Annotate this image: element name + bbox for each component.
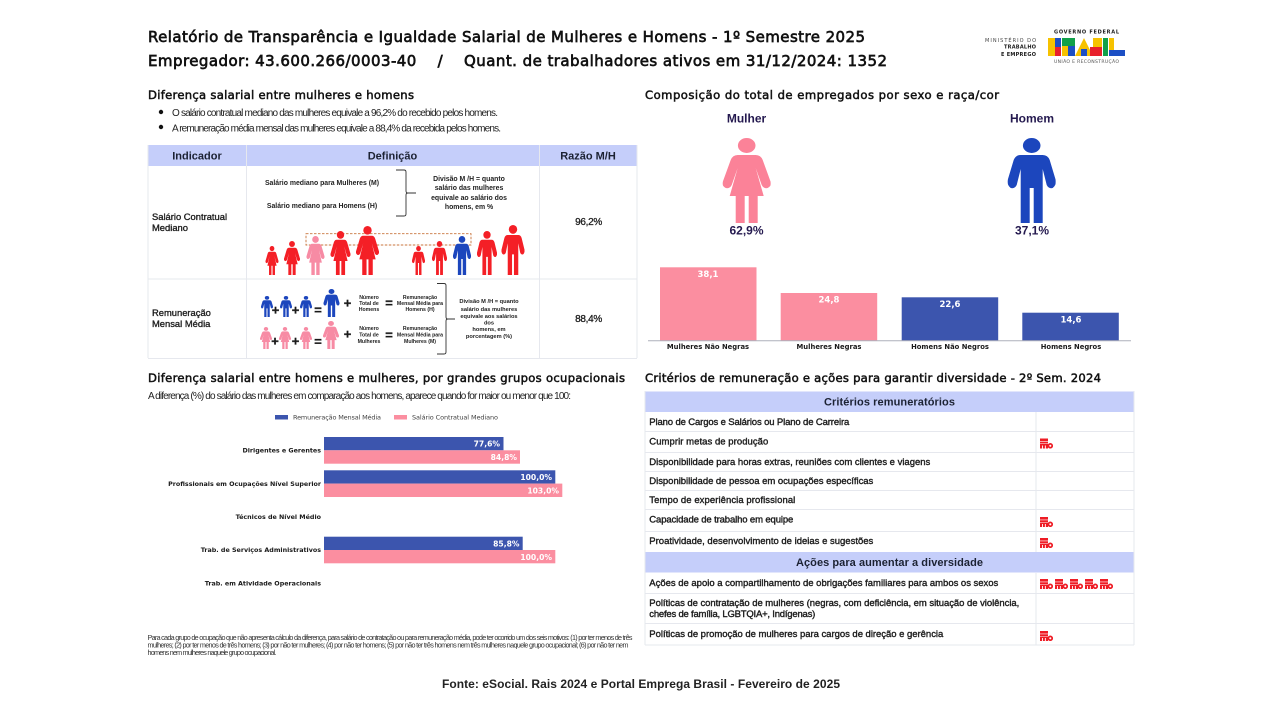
panel: critérios de remuneração: Tempo de experiência profissional <box>649 495 795 506</box>
panel: critérios de remuneração: Disponibilidade para horas extras, reuniões com clientes e viagens <box>649 457 931 468</box>
panel: critérios de remuneração: Critérios remuneratórios <box>824 396 955 408</box>
row: remuneração média: homens, em <box>472 327 506 333</box>
bar chart: grupos ocupacionais: 77,6% <box>474 440 500 448</box>
legend: Salário Contratual Mediano <box>412 414 498 422</box>
source: Fonte: eSocial. Rais 2024 e Portal Emprega Brasil - Fevereiro de 2025 <box>442 677 840 691</box>
row: salário contratual <box>152 170 602 275</box>
title: Empregador: 43.600.266/0003-40 / Quant. de trabalhadores ativos em 31/12/2024: 1352 <box>148 52 887 70</box>
bar chart: grupos ocupacionais: Trab. em Atividade Operacionais <box>205 580 321 588</box>
panel: critérios de remuneração: Plano de Cargos e Salários ou Plano de Carreira <box>649 417 850 428</box>
panel: critérios de remuneração: Disponibilidade de pessoa em ocupações específicas <box>649 476 874 487</box>
row: remuneração média: Remuneração <box>152 307 211 318</box>
row: remuneração média: Total de <box>359 332 379 338</box>
heading: composição: Composição do total de empregados por sexo e raça/cor <box>645 88 999 102</box>
heading: diferença salarial: Diferença salarial entre mulheres e homens <box>148 88 414 102</box>
panel: critérios de remuneração <box>645 391 1134 645</box>
bar chart: grupos ocupacionais <box>168 437 562 588</box>
panel: critérios de remuneração: Cumprir metas de produção <box>649 436 768 448</box>
row: remuneração média: Mulheres (M) <box>404 339 436 345</box>
panel: tabela de indicadores: Razão M/H <box>560 150 616 162</box>
bar chart: grupos ocupacionais: 100,0% <box>520 553 552 562</box>
bar chart: composição: 24,8 <box>819 296 840 306</box>
row: salário contratual: 96,2% <box>575 217 602 228</box>
bullet list <box>159 108 501 134</box>
bar chart: grupos ocupacionais: 84,8% <box>491 453 517 462</box>
row: salário contratual: Salário mediano para Homens (H) <box>267 203 377 210</box>
legend: Remuneração Mensal Média <box>293 414 381 422</box>
row: salário contratual: Mediano <box>152 222 188 233</box>
row: remuneração média: = <box>314 334 322 349</box>
panel: critérios de remuneração: Políticas de promoção de mulheres para cargos de direção e gerência <box>649 629 944 640</box>
panel: tabela de indicadores: Indicador <box>172 150 222 162</box>
row: remuneração média: salário das mulheres <box>461 307 517 313</box>
bar chart: composição: 38,1 <box>698 270 719 280</box>
row: remuneração média: + <box>344 326 352 342</box>
bar chart: grupos ocupacionais: Trab. de Serviços Administrativos <box>201 547 321 554</box>
icon: homem 37,1% <box>1008 112 1056 238</box>
row: remuneração média: Mensal Média para <box>397 332 443 338</box>
bar chart: grupos ocupacionais: Dirigentes e Gerentes <box>242 448 321 454</box>
row: remuneração média: Número <box>359 326 379 332</box>
row: remuneração média: + <box>272 302 280 318</box>
row: remuneração média: equivale aos salários <box>460 314 518 320</box>
row: remuneração média: = <box>385 328 393 342</box>
icon: mulher 62,9%: 62,9% <box>729 224 764 238</box>
icon: mulher 62,9% <box>722 112 771 238</box>
bar chart: composição: Mulheres Negras <box>797 343 861 351</box>
row: salário contratual: Divisão M /H = quanto <box>433 176 505 183</box>
logo: ministério e governo federal: E EMPREGO <box>1001 52 1036 58</box>
icons: marcações <box>1040 438 1112 641</box>
row: remuneração média: + <box>292 334 300 348</box>
row: salário contratual: Salário mediano para Mulheres (M) <box>265 180 379 187</box>
panel: critérios de remuneração: Ações para aumentar a diversidade <box>796 557 983 569</box>
row: remuneração média: Número <box>359 295 379 301</box>
bar chart: composição: Homens Não Negros <box>911 343 989 351</box>
row: remuneração média: + <box>292 302 300 318</box>
bar chart: grupos ocupacionais: Profissionais em Ocupações Nível Superior <box>168 480 322 488</box>
icon: mulher 62,9%: Mulher <box>727 112 766 126</box>
bullet list: O salário contratual mediano das mulheres equivale a 96,2% do recebido pelos homens. <box>172 108 498 119</box>
title: Relatório de Transparência e Igualdade Salarial de Mulheres e Homens - 1º Semestre 2025 <box>148 28 865 46</box>
icon: homem 37,1%: Homem <box>1010 112 1054 126</box>
row: remuneração média: Total de <box>359 301 379 307</box>
panel: critérios de remuneração: chefes de família, LGBTQIA+, Indígenas) <box>649 609 815 620</box>
logo: ministério e governo federal: GOVERNO FEDERAL <box>1054 30 1120 36</box>
panel: critérios de remuneração: Políticas de contratação de mulheres (negras, com deficiência, em situação de violência, <box>649 598 1019 609</box>
row: remuneração média: Homens (H) <box>405 307 435 313</box>
panel: tabela de indicadores: Definição <box>368 150 418 162</box>
row: remuneração média: = <box>385 296 393 310</box>
row: salário contratual: salário das mulheres <box>435 185 503 192</box>
heading: critérios: Critérios de remuneração e ações para garantir diversidade - 2º Sem. 2024 <box>645 371 1101 385</box>
panel: critérios de remuneração: Proatividade, desenvolvimento de ideias e sugestões <box>649 536 874 547</box>
row: remuneração média: Mensal Média para <box>397 301 443 307</box>
row: salário contratual: Salário Contratual <box>152 211 227 222</box>
footnote: Para cada grupo de ocupação que não apresenta cálculo da diferença, para salário de contratação ou para remuneração média, pode ter ocorrido um dos seis motivos: (1) por ter menos de três <box>148 633 633 642</box>
title <box>148 28 887 70</box>
panel: tabela de indicadores <box>148 145 637 358</box>
footnote: mulheres; (2) por ter menos de três homens; (3) por não ter mulheres; (4) por não ter homens; (5) por não ter três homens nem três mulheres naquele grupo ocupacional; (6) por não ter nem <box>148 640 629 650</box>
row: salário contratual: homens, em % <box>445 204 493 211</box>
row: remuneração média: + <box>344 296 352 310</box>
bar chart: composição: Homens Negros <box>1041 343 1101 351</box>
heading: grupos ocupacionais: Diferença salarial entre homens e mulheres, por grandes grupos ocupacionais <box>148 371 625 385</box>
logo: ministério e governo federal: UNIÃO E RECONSTRUÇÃO <box>1054 58 1119 65</box>
icon: homem 37,1%: 37,1% <box>1015 224 1049 238</box>
row: remuneração média: Remuneração <box>403 326 437 332</box>
footnote <box>148 633 633 657</box>
logo: ministério e governo federal <box>985 30 1125 65</box>
footnote: homens nem mulheres naquele grupo ocupacional. <box>148 648 277 657</box>
bar chart: grupos ocupacionais: Técnicos de Nível Médio <box>236 513 322 521</box>
row: remuneração média: + <box>271 334 279 348</box>
bar chart: composição: Mulheres Não Negras <box>667 343 749 351</box>
row: remuneração média: Remuneração <box>403 295 437 301</box>
row: salário contratual: equivale ao salário dos <box>431 195 507 202</box>
panel: critérios de remuneração: Capacidade de trabalho em equipe <box>649 514 793 526</box>
bar chart: composição: 22,6 <box>940 300 961 310</box>
row: remuneração média: Mulheres <box>358 339 380 345</box>
logo: ministério e governo federal: TRABALHO <box>1004 44 1036 50</box>
row: remuneração média: Divisão M /H = quanto <box>459 299 519 305</box>
row: remuneração média: Mensal Média <box>152 318 211 329</box>
row: remuneração média: Homens <box>359 307 379 313</box>
bullet list: A remuneração média mensal das mulheres equivale a 88,4% da recebida pelos homens. <box>172 124 501 134</box>
row: remuneração média: porcentagem (%) <box>466 334 512 340</box>
row: remuneração média <box>152 284 602 354</box>
bar chart: composição: 14,6 <box>1061 315 1082 325</box>
subtitle: explicação: A diferença (%) do salário das mulheres em comparação aos homens, aparece quando for maior ou menor que 100: <box>148 391 571 402</box>
row: remuneração média: dos <box>484 320 494 326</box>
logo: ministério e governo federal: MINISTÉRIO DO <box>985 36 1036 44</box>
row: remuneração média: 88,4% <box>575 314 602 325</box>
bar chart: composição <box>648 267 1131 351</box>
bar chart: grupos ocupacionais: 85,8% <box>493 540 520 548</box>
panel: critérios de remuneração: Ações de apoio a compartilhamento de obrigações familiares para ambos os sexos <box>649 578 999 589</box>
legend <box>275 414 498 422</box>
row: remuneração média: = <box>314 302 322 318</box>
bar chart: grupos ocupacionais: 103,0% <box>527 486 559 495</box>
bar chart: grupos ocupacionais: 100,0% <box>520 473 552 482</box>
